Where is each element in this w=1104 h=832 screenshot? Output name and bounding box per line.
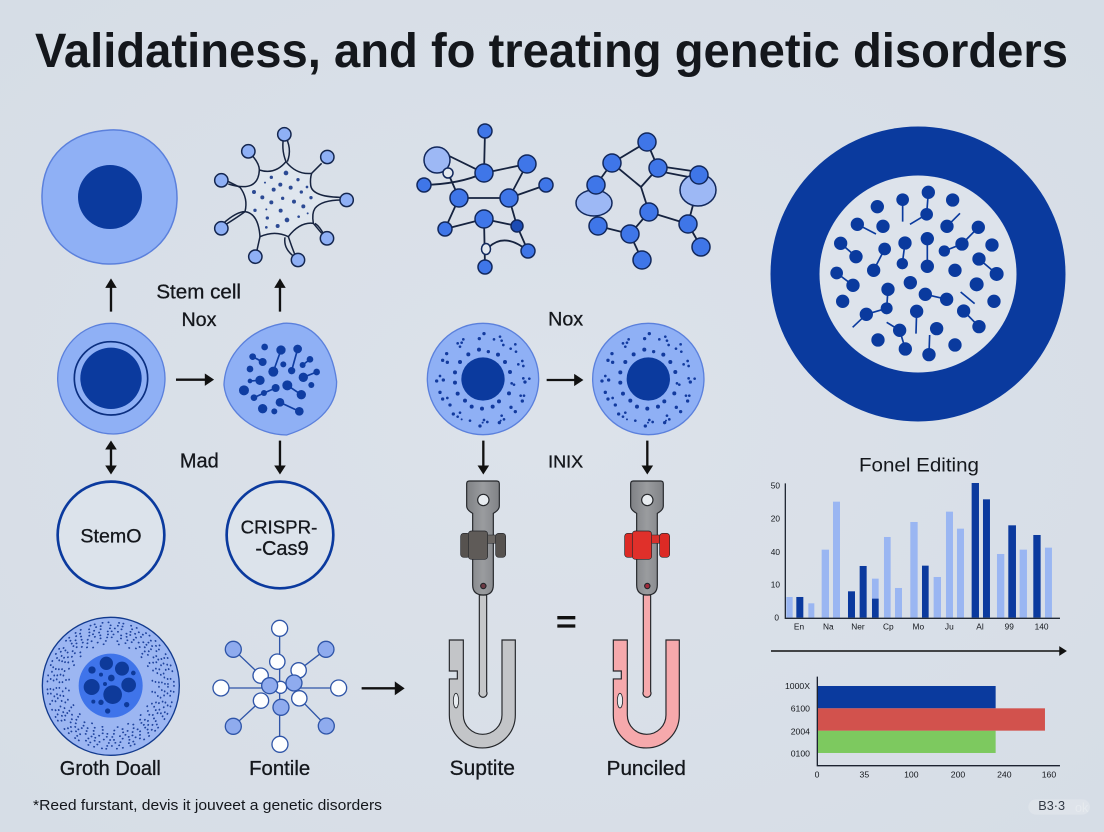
y axis labels: 10 (771, 580, 780, 590)
molecular network A (417, 124, 553, 274)
label: Nox left: Nox (181, 309, 217, 331)
y axis labels: 50 (771, 481, 780, 491)
watermark: ok (1075, 801, 1089, 815)
cell: stem cell with ringed nucleus (58, 323, 165, 434)
x axis labels: Al (976, 621, 984, 631)
x axis labels: 0 (815, 770, 820, 780)
arrow: right between cells (176, 376, 212, 384)
y axis labels: 6100 (791, 704, 810, 714)
label: Suptite: Suptite (450, 757, 515, 780)
y axis labels: 1000X (785, 681, 810, 691)
cell: dotted cell right (593, 323, 704, 435)
label: INIX: INIX (548, 452, 583, 472)
label: Groth Doall: Groth Doall (60, 758, 161, 780)
watermark: B3·3 (1038, 799, 1065, 813)
x axis labels: 100 (904, 770, 919, 780)
bottom left row: growth cell and network (42, 617, 403, 780)
tool: grey clamp and U-tube (449, 481, 515, 748)
y axis labels (771, 481, 780, 623)
y axis labels: 0 (774, 613, 779, 623)
blue bar (817, 686, 996, 708)
cell: cell with molecules (224, 323, 337, 435)
x axis labels: 160 (1042, 770, 1056, 780)
equals sign (557, 616, 575, 628)
bar chart: Fonel Editing (771, 456, 1060, 631)
cell: dotted cell left (427, 323, 539, 435)
molecular network B (576, 133, 716, 269)
y axis labels: 0100 (791, 748, 810, 758)
middle flow diagram: dotted cells (427, 309, 704, 472)
horizontal bar chart (785, 677, 1090, 815)
arrow: right between dotted cells (547, 376, 581, 384)
node: StemO (58, 482, 164, 588)
node: StemO: StemO (80, 526, 142, 548)
chart title: Fonel Editing (859, 456, 979, 477)
label: stem cell: Stem cell (156, 280, 241, 303)
x axis labels: Ju (945, 621, 954, 631)
long horizontal arrow (771, 648, 1066, 654)
arrow: down from left dotted cell (480, 441, 487, 472)
arrow: up from edited cell (276, 281, 284, 312)
x axis labels: Na (823, 621, 834, 631)
node: CRISPR-Cas9 (227, 482, 333, 588)
arrow: network to tool (362, 684, 403, 693)
x axis labels: Cp (883, 621, 894, 631)
cell: stippled growth cell (42, 617, 179, 755)
left flow diagram: stem cell to CRISPR (58, 280, 337, 588)
tools and U-tubes comparison (449, 481, 686, 780)
x axis labels: 200 (951, 770, 965, 780)
footnote: *Reed furstant, devis it jouveet a genetic disorders (33, 797, 382, 814)
x axis labels: Mo (913, 621, 924, 631)
x axis labels: 35 (860, 770, 869, 780)
title: Validatiness, and fo treating genetic disorders (35, 25, 1068, 78)
cell: top left with nucleus (42, 130, 177, 264)
x axis labels: En (794, 621, 804, 631)
x axis labels: 140 (1035, 621, 1049, 631)
y axis labels: 20 (771, 514, 780, 524)
y axis labels: 40 (771, 547, 780, 557)
cell: branching neuron-like network (215, 128, 353, 267)
watermark (1028, 799, 1090, 815)
light bars (786, 502, 1052, 618)
label: Fontile: Fontile (249, 758, 310, 780)
label: Mad: Mad (180, 451, 219, 473)
x axis labels (794, 621, 1049, 631)
arrow: up from stem cell (107, 281, 115, 312)
label: Punciled: Punciled (607, 757, 686, 780)
y axis labels (785, 681, 810, 758)
node: CRISPR-Cas9: CRISPR- (241, 516, 317, 537)
x axis labels (815, 770, 1056, 780)
arrow: down from right dotted cell (644, 441, 651, 472)
x axis labels: Ner (851, 621, 865, 631)
label: Nox middle: Nox (548, 309, 583, 331)
arrow: down from edited cell (276, 441, 284, 472)
y axis labels: 2004 (791, 726, 810, 736)
chart axes (817, 677, 1060, 766)
green bar (817, 731, 996, 753)
large ring cell with molecules (770, 126, 1066, 422)
tool: red clamp and pink U-tube (613, 481, 679, 748)
x axis labels: 240 (997, 770, 1012, 780)
node: CRISPR-Cas9: -Cas9 (255, 538, 309, 560)
network: Fontile (213, 620, 347, 752)
arrow: double-headed (107, 443, 115, 472)
chart axes (785, 483, 1060, 618)
dark bars (796, 483, 1041, 618)
red bar (817, 708, 1045, 731)
x axis labels: 99 (1005, 621, 1014, 631)
